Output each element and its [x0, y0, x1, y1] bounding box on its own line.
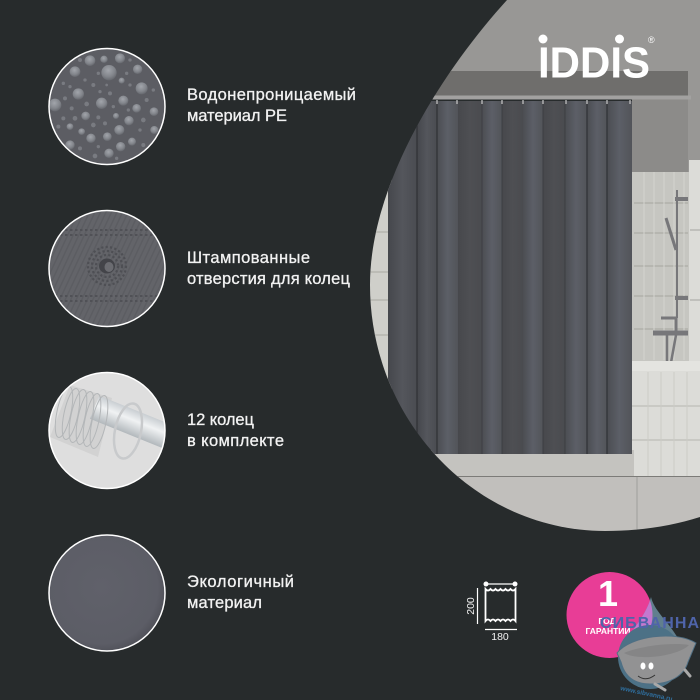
drop overlap on badge [633, 600, 652, 630]
height dimension [476, 588, 478, 624]
panel: eco material [49, 535, 294, 651]
warranty number: 1 [598, 573, 618, 614]
round base [618, 625, 682, 689]
shower fixture [653, 190, 688, 368]
watermark title: СИБВАННА [600, 615, 699, 632]
feature text: Водонепроницаемый [187, 86, 356, 104]
warranty badge [566, 572, 652, 658]
warranty label: ГАРАНТИИ [585, 626, 631, 636]
curtain [388, 101, 632, 454]
icon: curtain dimensions 200 x 180 [465, 582, 518, 643]
warranty label: ГОД [598, 616, 616, 626]
feature text: материал [187, 594, 262, 612]
bath rim [632, 361, 700, 372]
feature text: отверстия для колец [187, 270, 351, 288]
back wall [632, 100, 688, 172]
registered mark: ® [648, 35, 655, 45]
ring outline [49, 372, 165, 488]
logo: iddis: IDDIS [538, 38, 650, 88]
photo: rings on rod [50, 373, 164, 488]
feature text [187, 573, 294, 612]
feature text: материал PE [187, 107, 287, 125]
skirting under curtain [431, 450, 634, 476]
feature text [187, 86, 356, 125]
bath front tiles [632, 371, 700, 477]
bathtub [617, 636, 696, 690]
curtain rod [420, 96, 691, 104]
feature text: Экологичный [187, 573, 294, 591]
panel: twelve rings included [49, 372, 284, 489]
warranty label [585, 616, 631, 636]
photo: bathroom with curtain [360, 0, 700, 536]
face [640, 662, 646, 670]
water drop [618, 597, 684, 655]
feature text [187, 249, 351, 288]
icon: curtain dimensions 200 x 180: 180 [491, 631, 509, 643]
feature text: в комплекте [187, 432, 284, 450]
right pillar [688, 71, 700, 172]
panel: waterproof material [49, 48, 356, 165]
feature text: Штампованные [187, 249, 310, 267]
feature text [187, 411, 284, 450]
ceiling [450, 0, 700, 72]
pink circle [566, 572, 652, 658]
panel: stamped ring holes [49, 210, 351, 327]
left wall tiles [370, 180, 392, 388]
rod [486, 583, 515, 585]
icon: curtain dimensions 200 x 180: 200 [465, 597, 477, 615]
photo: fabric swatch [49, 535, 165, 651]
upper wall band [433, 71, 688, 98]
ring outline [49, 210, 165, 326]
tub feet [655, 670, 690, 690]
watermark: sibvanna [600, 597, 699, 700]
floor [457, 476, 700, 531]
ring outline [49, 48, 165, 164]
width dimension [485, 628, 517, 630]
curtain outline [486, 589, 516, 621]
feature text: 12 колец [187, 411, 255, 429]
photo: water drops [49, 48, 165, 165]
shower tiled niche [632, 160, 700, 365]
photo: eyelet hole [49, 210, 165, 327]
